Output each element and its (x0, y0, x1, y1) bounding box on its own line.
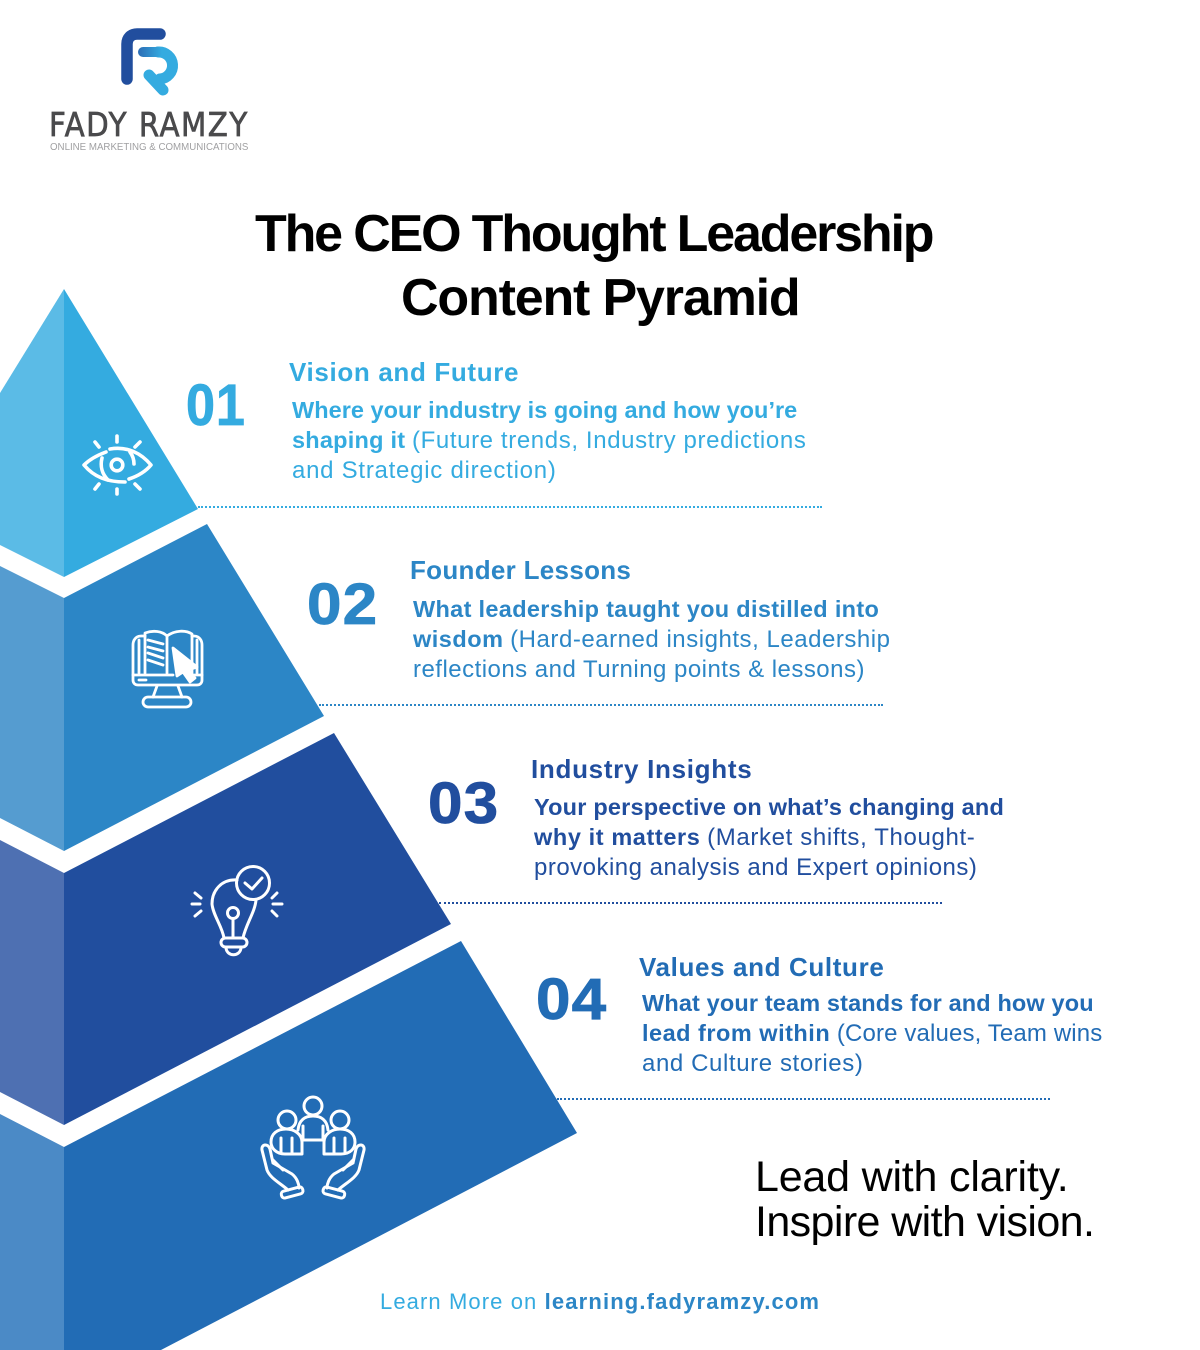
section 02 (307, 555, 891, 683)
body: What leadership taught you distilled into (413, 596, 879, 622)
pyramid tier 3 (0, 733, 451, 1125)
body: provoking analysis and Expert opinions) (534, 854, 977, 881)
body: What your team stands for and how you (642, 990, 1094, 1016)
title: Content Pyramid (401, 269, 800, 327)
body: reflections and Turning points & lessons) (413, 656, 865, 683)
body: and Culture stories) (642, 1050, 863, 1077)
body (534, 794, 1004, 881)
body: Your perspective on what’s changing and (534, 794, 1004, 820)
icon: eye (84, 436, 151, 494)
body: lead from within (Core values, Team wins (642, 1020, 1102, 1047)
tagline: Lead with clarity. (755, 1153, 1068, 1201)
number 04: 04 (536, 967, 607, 1032)
section 03 (428, 754, 1004, 881)
heading: Vision and Future (289, 357, 519, 387)
icon: team in hands (262, 1097, 364, 1199)
body: Where your industry is going and how you’re (292, 397, 797, 423)
number 02: 02 (307, 572, 378, 637)
icon: light bulb with check (192, 866, 282, 955)
logo name: FADY RAMZY (49, 105, 249, 144)
tagline: Inspire with vision. (755, 1198, 1094, 1246)
logo tagline: ONLINE MARKETING & COMMUNICATIONS (50, 141, 248, 153)
heading: Industry Insights (531, 754, 752, 784)
logo mark (127, 34, 173, 90)
tagline (755, 1153, 1094, 1246)
body (642, 990, 1102, 1077)
title: The CEO Thought Leadership (255, 205, 932, 263)
body: wisdom (Hard-earned insights, Leadership (413, 626, 891, 653)
heading: Founder Lessons (410, 555, 631, 585)
number 01: 01 (186, 373, 246, 438)
body (413, 596, 891, 683)
number 03: 03 (428, 771, 499, 836)
pyramid tier 1 (0, 289, 198, 577)
footer link: Learn More on learning.fadyramzy.com (380, 1289, 820, 1314)
pyramid tier 2 (0, 524, 324, 851)
body: shaping it (Future trends, Industry predictions (292, 427, 806, 454)
section 04 (536, 952, 1102, 1077)
body: and Strategic direction) (292, 457, 557, 484)
title (255, 205, 932, 327)
body (292, 397, 806, 484)
icon: book on monitor (133, 631, 202, 707)
body: why it matters (Market shifts, Thought- (534, 824, 975, 851)
section 01 (186, 357, 806, 484)
pyramid tier 4 (0, 941, 577, 1350)
heading: Values and Culture (639, 952, 884, 982)
